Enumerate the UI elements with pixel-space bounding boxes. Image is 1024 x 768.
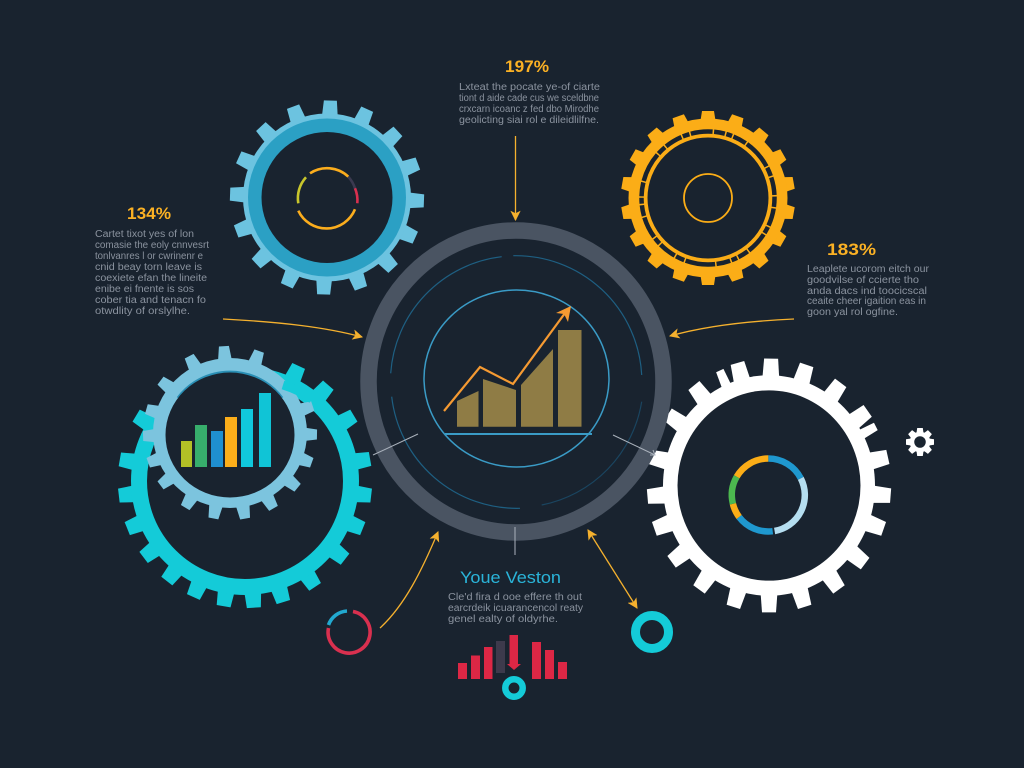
gear: teal large bbox=[118, 362, 372, 608]
icon: small teal ring bbox=[505, 679, 523, 697]
callout: bottom: earcrdeik icuarancencol reaty bbox=[448, 603, 583, 614]
callout: top: tiont d aide cade cus we sceldbne bbox=[459, 93, 599, 104]
callout: right: 183% bbox=[827, 240, 876, 259]
ring: blue gear multicolour centre bbox=[298, 168, 357, 228]
callout: top: Lxteat the pocate ye-of ciarte bbox=[459, 82, 600, 93]
callout: bottom: Cle'd fira d ooe effere th out bbox=[448, 592, 582, 603]
callout: left: coexiete efan the lineite bbox=[95, 273, 207, 284]
callout: bottom: genel ealty of oldyrhe. bbox=[448, 614, 558, 625]
callout: right bbox=[807, 240, 930, 318]
callout: right: ceaite cheer igaition eas in bbox=[807, 296, 926, 307]
icon: teal ring bbox=[636, 616, 668, 648]
callout: left: 134% bbox=[127, 204, 171, 223]
callout: bottom: Youe Veston bbox=[460, 568, 561, 587]
callout: right: goon yal rol ogfine. bbox=[807, 307, 898, 318]
connector lines bbox=[373, 434, 655, 555]
callout: bottom bbox=[448, 568, 583, 625]
arrow: top bbox=[514, 136, 516, 220]
central hub: gray ring bbox=[368, 230, 664, 532]
callout: top: crxcarn icoanc z fed dbo Mirodhe bbox=[459, 104, 599, 115]
arrow: right bbox=[670, 319, 794, 336]
callout: left: cober tia and tenacn fo bbox=[95, 295, 206, 306]
icon: red and blue ring bbox=[328, 611, 370, 653]
callout: left: Cartet tixot yes of lon bbox=[95, 229, 194, 240]
callout: left: enibe ei fnente is sos bbox=[95, 284, 194, 295]
circle: orange gear centre bbox=[684, 174, 732, 222]
central growth chart bbox=[424, 290, 609, 467]
chart bars bbox=[457, 330, 582, 427]
gear: white right bbox=[647, 358, 891, 612]
gear: light blue small with bar chart bbox=[143, 346, 317, 520]
callout: left: comasie the eoly cnnvesrt bbox=[95, 240, 209, 251]
callout: top bbox=[459, 57, 600, 126]
trend arrow bbox=[444, 306, 571, 411]
teal arc overlapping gear bbox=[283, 385, 312, 399]
callout: left bbox=[95, 204, 209, 317]
bar chart: red bars with down arrow bbox=[458, 635, 567, 679]
callout: left: otwdlity of orslylhe. bbox=[95, 306, 190, 317]
arrow: bottom right bbox=[588, 530, 637, 608]
gear: orange top right bbox=[621, 111, 795, 285]
callout: right: goodvilse of ccierte tho bbox=[807, 275, 919, 286]
callout: top: 197% bbox=[505, 57, 549, 76]
arrow: bottom left bbox=[380, 532, 438, 628]
bar chart: coloured bars bbox=[181, 393, 271, 467]
thin blue arcs bbox=[391, 256, 642, 508]
ring: white gear multicolour centre bbox=[732, 458, 805, 531]
callout: left: cnid beay torn leave is bbox=[95, 262, 202, 273]
callout: right: Leaplete ucorom eitch our bbox=[807, 264, 930, 275]
callout: top: geolicting siai rol e dileidlilfne. bbox=[459, 115, 599, 126]
callout: right: anda dacs ind toocicscal bbox=[807, 286, 927, 297]
callout: left: tonlvanres l or cwrinenr e bbox=[95, 251, 203, 262]
icon: small white gear bbox=[906, 428, 934, 456]
gear: blue top left bbox=[230, 100, 424, 295]
arrow: left bbox=[223, 319, 362, 337]
